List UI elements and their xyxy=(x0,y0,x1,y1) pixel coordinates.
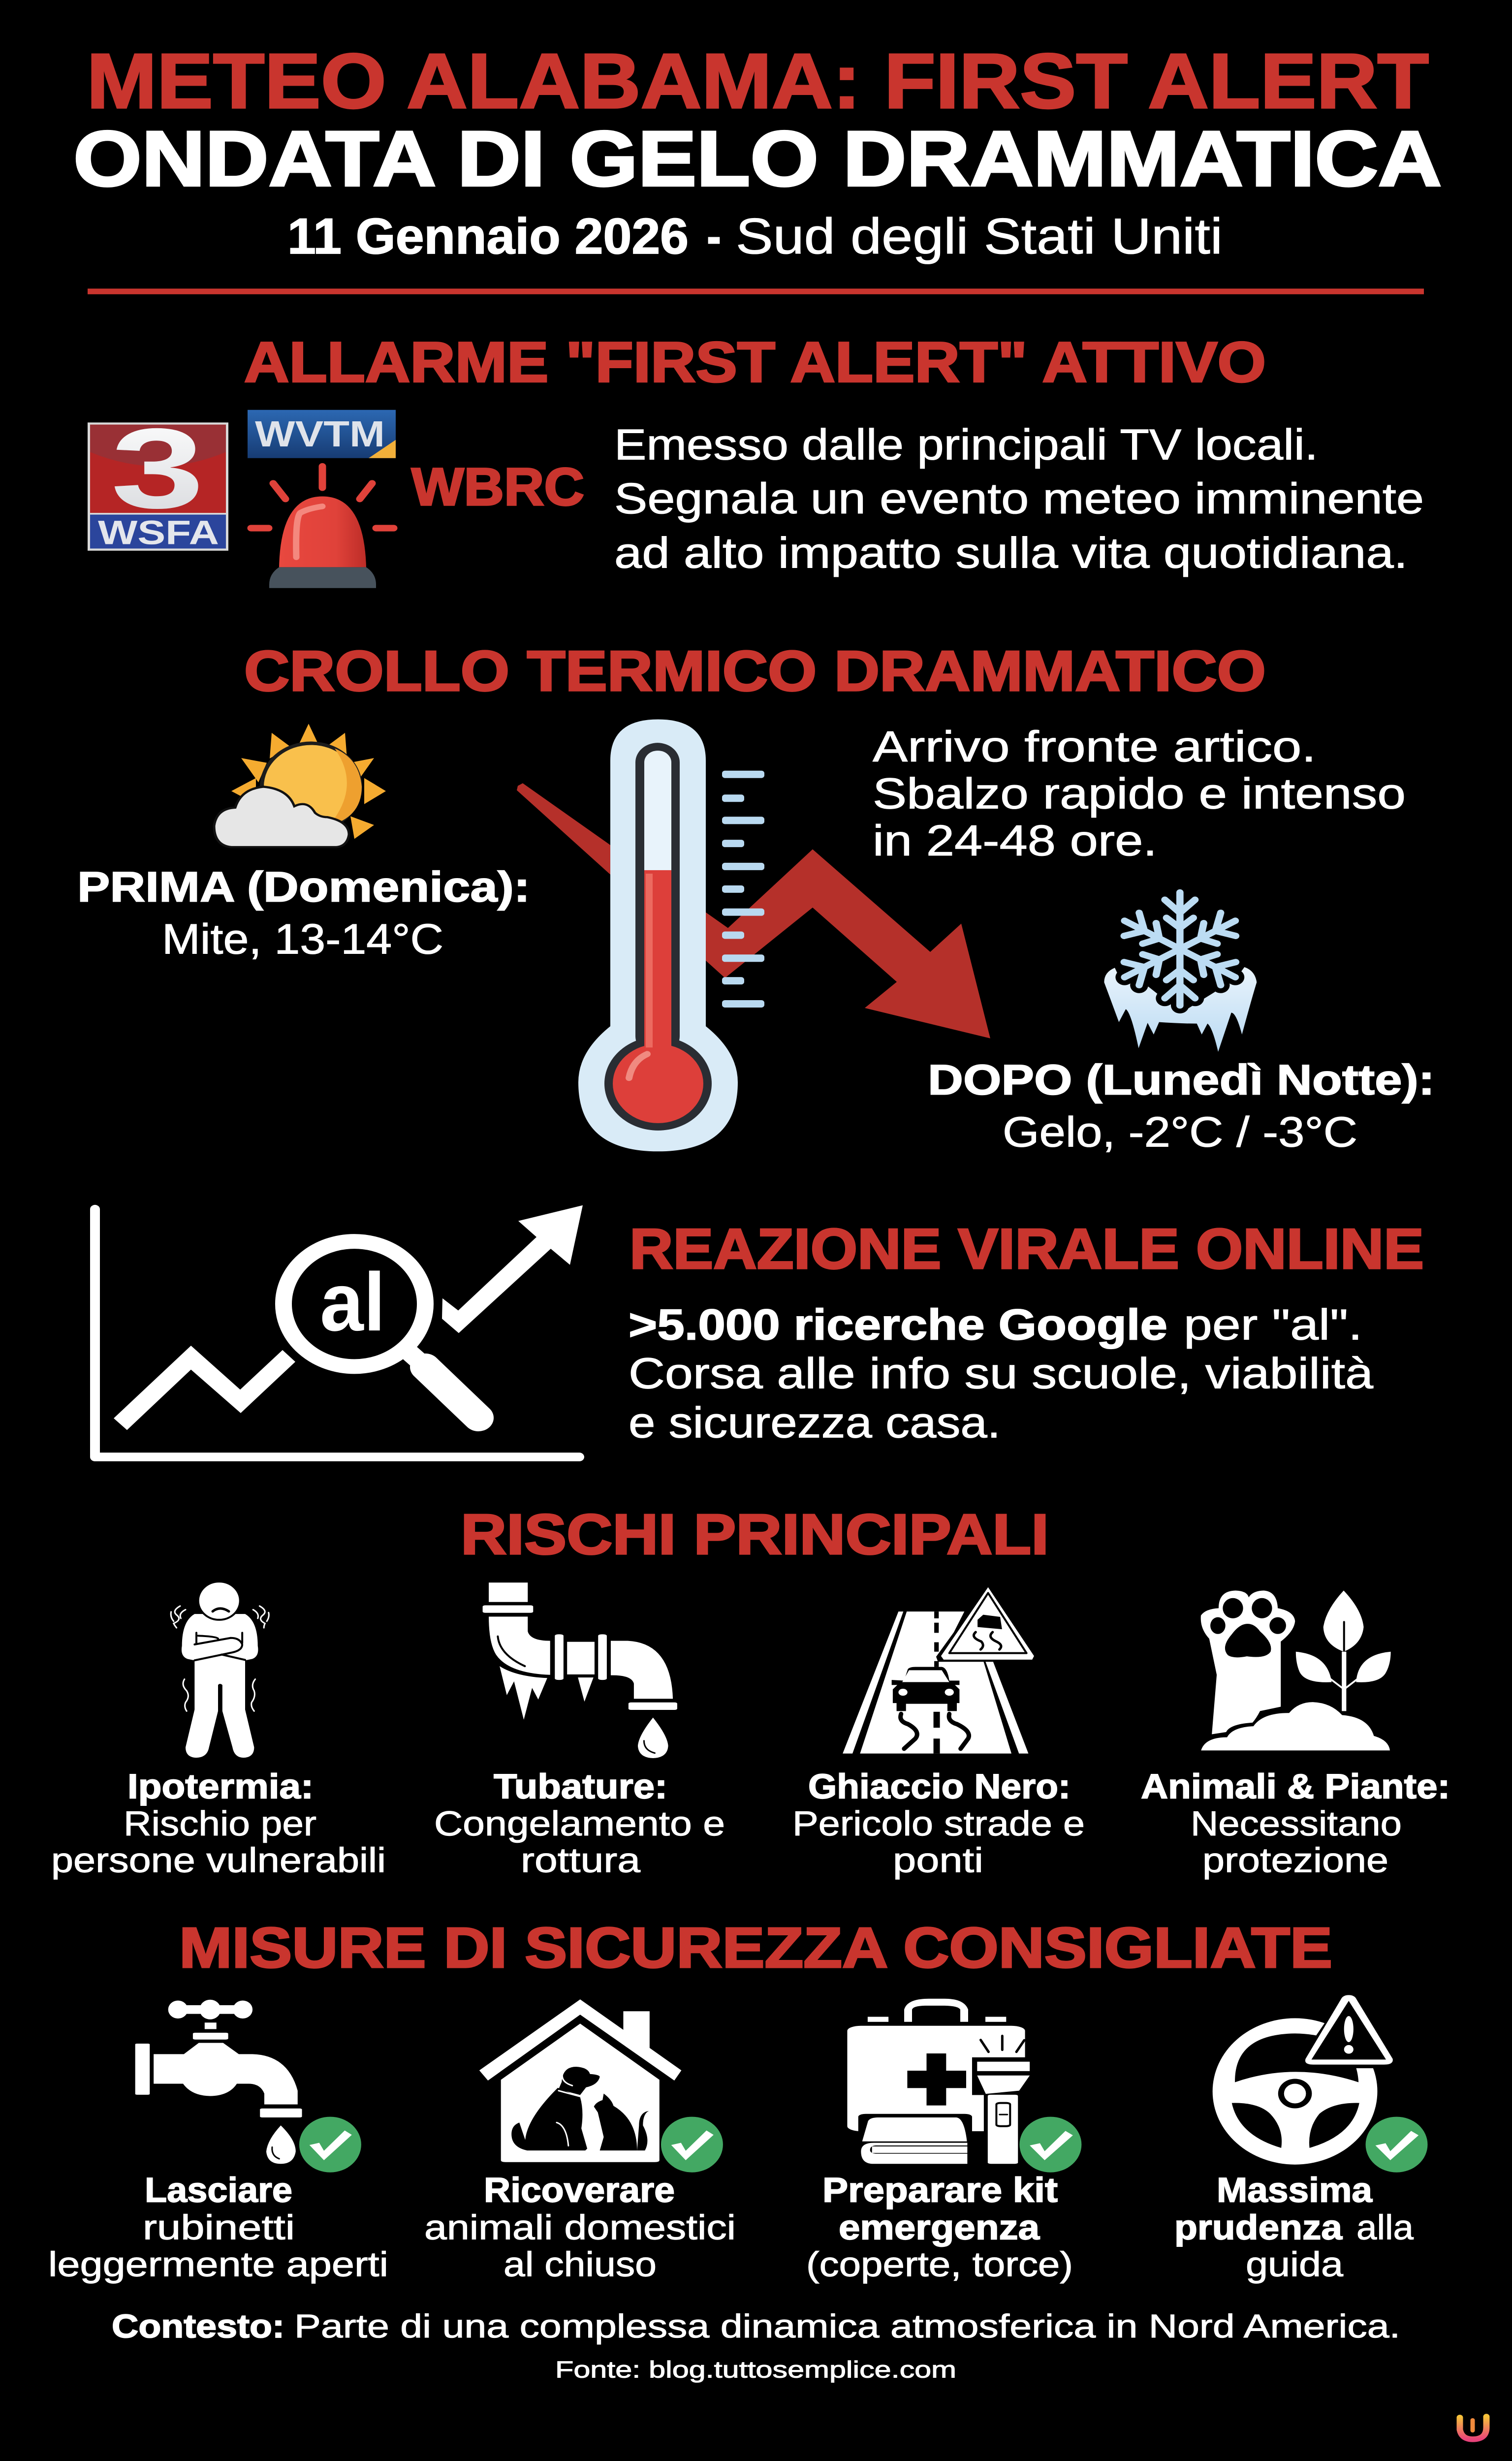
icon: frozen pipe xyxy=(483,1582,677,1758)
text: arrivo fronte artico: Sbalzo rapido e intenso xyxy=(873,769,1406,818)
label: animali e piante xyxy=(1141,1767,1450,1879)
title line 1: METEO ALABAMA: FIRST ALERT xyxy=(87,37,1429,125)
label: ghiaccio nero xyxy=(792,1767,1085,1879)
icon: dripping tap xyxy=(135,2000,302,2164)
label: animali e piante: protezione xyxy=(1202,1841,1388,1879)
subtitle: - xyxy=(707,208,721,264)
heading: crollo termico: CROLLO TERMICO DRAMMATICO xyxy=(244,639,1266,703)
logo: WSFA xyxy=(88,405,228,552)
text: arrivo fronte artico: in 24-48 ore. xyxy=(873,816,1157,865)
text: fonte: Fonte: blog.tuttosemplice.com xyxy=(555,2357,956,2383)
label: tubature: rottura xyxy=(521,1841,641,1879)
icon: black ice road xyxy=(843,1585,1041,1754)
panel: misure di sicurezza xyxy=(48,1916,1428,2284)
icon: check badge kit xyxy=(1019,2117,1081,2173)
label: ghiaccio nero: ponti xyxy=(893,1841,983,1879)
icon: corner logo xyxy=(1460,2417,1486,2439)
panel: reazione virale xyxy=(95,1205,1424,1457)
label: tubature: Tubature: xyxy=(494,1767,667,1805)
label: ricoverare animali xyxy=(424,2171,736,2284)
label: lasciare rubinetti xyxy=(48,2171,388,2284)
text: ricerche google: Corsa alle info su scuole, viabilità xyxy=(629,1349,1373,1398)
icon: paw and plant xyxy=(1200,1590,1391,1751)
label: tubature: Congelamento e xyxy=(434,1804,725,1843)
label: ricoverare animali: Ricoverare xyxy=(484,2171,675,2209)
label: ipotermia xyxy=(51,1767,386,1879)
chart icon: search trend: al xyxy=(320,1256,385,1348)
subtitle: Sud degli Stati Uniti xyxy=(736,208,1223,264)
label: massima prudenza: prudenza xyxy=(1174,2208,1342,2247)
label: massima prudenza xyxy=(1174,2171,1414,2284)
label: lasciare rubinetti: leggermente aperti xyxy=(48,2245,388,2284)
label: preparare kit xyxy=(806,2171,1073,2284)
text: contesto: Contesto: xyxy=(112,2308,284,2345)
icon: frozen snowflake xyxy=(1104,892,1257,1052)
icon: thermometer xyxy=(578,719,738,1151)
text: first alert description: ad alto impatto sulla vita quotidiana. xyxy=(614,529,1408,577)
heading: reazione virale: REAZIONE VIRALE ONLINE xyxy=(630,1217,1424,1281)
logo: WVTM: WVTM xyxy=(255,413,385,454)
label: preparare kit: (coperte, torce) xyxy=(806,2245,1073,2284)
heading: misure: MISURE DI SICUREZZA CONSIGLIATE xyxy=(179,1916,1332,1980)
icon: house with pets xyxy=(479,1999,681,2162)
text: first alert description: Segnala un evento meteo imminente xyxy=(614,474,1424,523)
label: preparare kit: emergenza xyxy=(839,2208,1040,2247)
text: ricerche google: e sicurezza casa. xyxy=(629,1398,1001,1447)
icon: shivering person xyxy=(171,1581,269,1758)
text: first alert description xyxy=(614,420,1424,577)
label: preparare kit: Preparare kit xyxy=(822,2171,1058,2209)
label: lasciare rubinetti: rubinetti xyxy=(143,2208,295,2247)
heading: rischi: RISCHI PRINCIPALI xyxy=(461,1502,1049,1566)
icon: check badge wheel xyxy=(1366,2117,1428,2173)
text: ricerche google: per "al". xyxy=(1184,1300,1362,1349)
label: ipotermia: Ipotermia: xyxy=(127,1767,314,1805)
subtitle xyxy=(287,208,1223,264)
label: massima prudenza: alla xyxy=(1356,2208,1414,2247)
title block xyxy=(73,37,1442,264)
chart icon: search trend xyxy=(95,1205,583,1457)
label: animali e piante: Necessitano xyxy=(1191,1804,1402,1843)
arrow: falling temperature xyxy=(517,783,990,1039)
icon: red beacon xyxy=(251,467,394,588)
label: ricoverare animali: animali domestici xyxy=(424,2208,736,2247)
panel: allarme first alert xyxy=(88,330,1424,588)
label: ricoverare animali: al chiuso xyxy=(504,2245,657,2284)
label: ipotermia: Rischio per xyxy=(124,1804,316,1843)
label: lasciare rubinetti: Lasciare xyxy=(145,2171,292,2209)
label: ghiaccio nero: Pericolo strade e xyxy=(792,1804,1085,1843)
subtitle: 11 Gennaio 2026 xyxy=(287,208,689,264)
title line 2: ONDATA DI GELO DRAMMATICA xyxy=(73,115,1442,203)
label: ipotermia: persone vulnerabili xyxy=(51,1841,386,1879)
icon: sun and cloud xyxy=(214,724,386,847)
text: dopo: Gelo, -2°C / -3°C xyxy=(1003,1108,1357,1156)
text: first alert description: Emesso dalle principali TV locali. xyxy=(614,420,1318,469)
label: massima prudenza: Massima xyxy=(1217,2171,1372,2209)
text: contesto: Parte di una complessa dinamica atmosferica in Nord America. xyxy=(294,2308,1400,2345)
text: dopo xyxy=(928,1056,1435,1156)
label: animali e piante: Animali & Piante: xyxy=(1141,1767,1450,1805)
label: tubature xyxy=(434,1767,725,1879)
text: ricerche google: >5.000 ricerche Google xyxy=(629,1300,1167,1349)
text: prima: Mite, 13-14°C xyxy=(162,915,443,963)
label: ghiaccio nero: Ghiaccio Nero: xyxy=(808,1767,1071,1805)
text: prima: PRIMA (Domenica): xyxy=(77,863,530,911)
text: arrivo fronte artico: Arrivo fronte artico. xyxy=(873,723,1316,771)
logo: WSFA: WSFA xyxy=(98,513,219,552)
panel: crollo termico xyxy=(77,639,1435,1156)
text: dopo: DOPO (Lunedì Notte): xyxy=(928,1056,1435,1104)
icon: check badge tap xyxy=(299,2117,361,2173)
logo: WSFA: 3 xyxy=(111,405,204,532)
logo: WBRC: WBRC xyxy=(411,457,584,516)
icon: check badge house xyxy=(661,2117,723,2173)
icon: steering wheel warning xyxy=(1213,1988,1404,2165)
icon: thermometer scale ticks xyxy=(722,771,764,1008)
icon: emergency kit xyxy=(847,1999,1033,2165)
label: massima prudenza: guida xyxy=(1246,2245,1344,2284)
text: prima xyxy=(77,863,530,963)
text: arrivo fronte artico xyxy=(873,723,1406,865)
panel: rischi principali xyxy=(51,1502,1450,1879)
heading: allarme: ALLARME "FIRST ALERT" ATTIVO xyxy=(244,330,1266,394)
text: ricerche google xyxy=(629,1300,1373,1447)
